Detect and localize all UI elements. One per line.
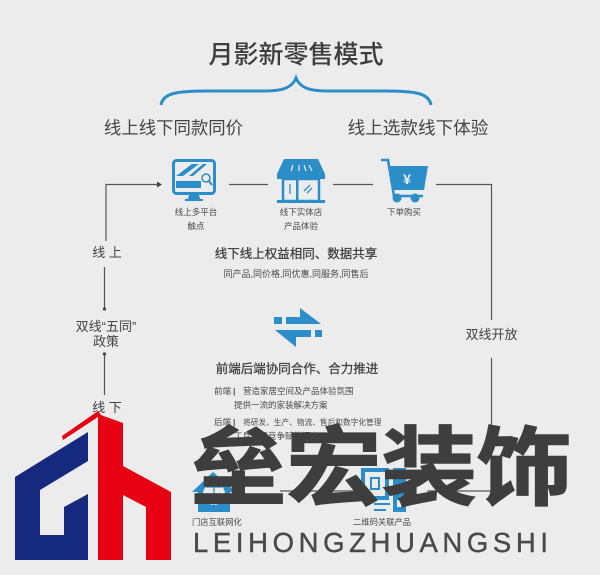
text: front and back end details: | [233, 417, 235, 427]
logo [15, 411, 171, 560]
icon: exchange arrows [274, 308, 322, 347]
text: front and back end details: 后端 [214, 417, 232, 427]
side labels: 双线开放 [465, 327, 518, 342]
watermark: company name: 垒宏装饰 [191, 421, 572, 517]
bottom icon labels [192, 517, 411, 527]
text: front and back end details: 提供一流的家装解决方案 [234, 400, 328, 410]
text: front and back end details: 将研发、生产、物流、售后和数字化管理 [243, 417, 382, 427]
text: front and back end details [214, 386, 382, 441]
text: front and back end details: | [233, 386, 235, 396]
side labels: 线 上 [92, 245, 122, 260]
logo: red roof [62, 411, 101, 440]
icon labels: 线上多平台 [175, 207, 217, 217]
icon labels: 线下实体店 [280, 207, 323, 217]
heading: front and back end: 前端后端协同合作、合力推进 [216, 361, 379, 376]
side labels [76, 245, 518, 415]
icon labels: 触点 [187, 221, 205, 231]
text: front and back end details: 营造家居空间及产品体验氛围 [243, 386, 354, 396]
heading: shared rights: 线下线上权益相同、数据共享 [215, 246, 377, 261]
logo: blue G [15, 432, 88, 560]
flow connector lines [104, 184, 492, 491]
icon: shopping cart [381, 160, 428, 202]
side labels: 线 下 [92, 400, 122, 415]
bottom icon labels: 门店互联网化 [192, 517, 242, 527]
arrowhead and line dots [103, 182, 162, 356]
icon: house globe [192, 472, 236, 512]
icon labels [175, 207, 421, 231]
icon: QR code [363, 468, 406, 512]
icon: monitor [174, 160, 214, 201]
brace [161, 78, 431, 105]
icon labels: 下单购买 [387, 207, 421, 217]
text: front and back end details: 前端 [214, 386, 232, 396]
watermark: pinyin: LEIHONGZHUANGSHI [193, 527, 548, 558]
logo: red h [98, 414, 171, 560]
subheading right: 线上选款线下体验 [348, 118, 489, 138]
title: 月影新零售模式 [208, 41, 384, 69]
side labels: 双线“五同” [76, 319, 136, 334]
bottom icon labels: 二维码关联产品 [353, 517, 411, 527]
icon labels: 产品体验 [284, 221, 318, 231]
text: five sames: 同产品,同价格,同优惠,同服务,同售后 [223, 268, 369, 279]
side labels: 政策 [93, 334, 119, 349]
text: front and back end details: 工具前置竞争赋能门店 [234, 431, 320, 441]
subheading left: 线上线下同款同价 [104, 118, 243, 138]
icon: shopping cart: ¥ [403, 171, 411, 187]
icon: store [277, 159, 325, 203]
